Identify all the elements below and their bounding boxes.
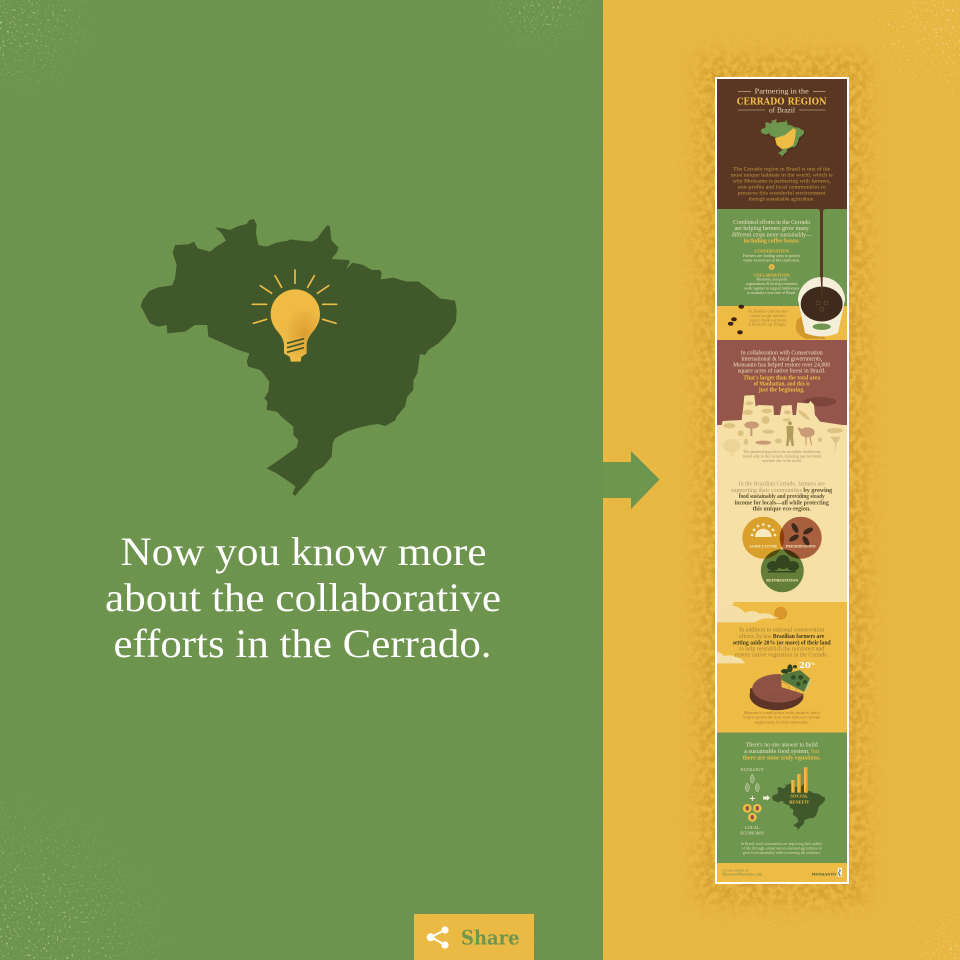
title block: CERRADO REGION: [737, 97, 827, 107]
coffee text: work together to support landowners: [744, 287, 800, 291]
arrow: [603, 451, 660, 509]
skyline and wildlife illustration: [717, 395, 847, 456]
communities text: this unique eco-region.: [753, 507, 811, 513]
venn circles: [742, 517, 822, 592]
equation text: a sustainable food system, but: [744, 748, 820, 755]
mini map of Brazil: [761, 119, 805, 158]
icon: agriculture: [751, 523, 776, 537]
icon: ampersand badge: &: [770, 265, 774, 270]
land use caption: [743, 711, 820, 724]
panel: brown intro: [717, 79, 847, 210]
communities text: [731, 480, 832, 513]
conservation text: That's larger than the total area: [743, 375, 820, 381]
coffee text: [732, 219, 812, 295]
coffee text: COLLABORATION: [754, 273, 790, 277]
panel: footer: LEARN MORE AT: [722, 869, 750, 873]
share button: [414, 914, 534, 960]
conservation text: [733, 351, 830, 393]
beans: [728, 305, 744, 334]
headline: [105, 529, 501, 666]
land use text: setting aside 20% (or more) of their land: [733, 639, 831, 646]
conservation text: just the beginning.: [758, 387, 805, 393]
panel: yellow coffee cup: [717, 276, 847, 341]
equation caption: grow food sustainably while recovering the rainforest.: [743, 851, 821, 855]
equation caption: In Brazil, local communities are improving their quality: [741, 842, 822, 847]
communities text: In the Brazilian Cerrado, farmers are: [739, 480, 825, 487]
icon: Monsanto logo: [838, 868, 842, 877]
intro paragraph: preserve this wonderful environment: [738, 189, 826, 196]
icon: light bulb: [252, 270, 337, 362]
communities text: food sustainably and providing steady: [739, 494, 825, 500]
ecology inputs: [740, 767, 770, 836]
conservation text: International & local governments,: [741, 357, 823, 363]
venn circles: AGRICULTURE: [748, 544, 778, 548]
equation caption: of life through conservation-oriented agriculture to: [742, 847, 822, 851]
coffee text: water resources in the rainforest.: [743, 258, 800, 262]
intro paragraph: [731, 166, 833, 203]
venn circles: PRESERVATION: [786, 544, 816, 548]
panel: green equation: [717, 732, 847, 864]
pie chart: 20 percent: [750, 661, 815, 710]
panel: cream communities: [717, 395, 847, 603]
wildlife caption: nowhere else in the world.: [762, 459, 802, 463]
wildlife caption: [743, 450, 821, 463]
headline: about the collaborative: [105, 575, 501, 620]
land use caption: supply forests for local communities.: [755, 720, 809, 724]
coffee text: Farmers are finding ways to protect: [743, 254, 801, 258]
ecology inputs: ECOLOGY: [741, 767, 765, 772]
conservation text: In collaboration with Conservation: [741, 351, 823, 357]
title block: [737, 87, 827, 114]
coffee cup: [796, 276, 845, 339]
icon: reforestation: [767, 555, 799, 572]
conservation text: Monsanto has helped restore over 24,000: [733, 363, 830, 369]
pie chart: 20 percent: 20: [799, 661, 811, 671]
equation text: [743, 743, 821, 761]
land use text: restore native vegetation in the Cerrado.: [735, 652, 829, 658]
coffee text: different crops more sustainably—: [732, 231, 812, 238]
white frame: [715, 77, 849, 884]
land use caption: Monsanto is a small partner in this initiative, which: [744, 711, 820, 716]
intro paragraph: through sustainable agriculture.: [749, 197, 815, 203]
intro paragraph: why Monsanto is partnering with farmers,: [733, 177, 831, 184]
ecology inputs: ECONOMY: [740, 831, 765, 836]
coffee text: including coffee beans.: [744, 239, 800, 245]
intro paragraph: The Cerrado region in Brazil is one of the: [733, 166, 831, 173]
coffee text: are helping farmers grow many: [735, 225, 809, 232]
icon: preservation: [788, 522, 814, 547]
headline: efforts in the Cerrado.: [114, 621, 492, 666]
cup note: [748, 309, 788, 328]
cup note: in Brazil, they say 'Obrigado.': [748, 323, 788, 328]
land use caption: helps to protect the local water table and cultivate: [743, 716, 820, 720]
background: yellow panel: [603, 0, 960, 960]
grunge halo around infographic: [697, 55, 868, 905]
share button: Share: [461, 926, 520, 950]
land use text: efforts, by law Brazilian farmers are: [739, 633, 825, 640]
pie chart: 20 percent: %: [811, 661, 815, 666]
cup note: So, Brazilian coffee the next: [748, 309, 788, 314]
land use text: [733, 627, 831, 658]
infographic thumbnail: [715, 77, 849, 884]
equation caption: [741, 842, 822, 855]
intro paragraph: non-profits and local communities to: [738, 184, 826, 191]
coffee text: to maintain a true taste of Brazil.: [747, 291, 796, 295]
title block: Partnering in the: [755, 87, 809, 96]
coffee text: organizations & local governments: [746, 282, 798, 286]
communities text: income for locals—all while protecting: [735, 500, 829, 506]
ecology inputs: LOCAL: [745, 825, 760, 830]
sun: [774, 607, 787, 620]
headline: Now you know more: [120, 529, 487, 574]
land use text: In addition to national conservation: [739, 627, 824, 633]
wildlife caption: This partnership protects the incredible biodiversity: [743, 450, 821, 454]
panel: yellow land use: [717, 602, 847, 733]
panel: green coffee: [717, 209, 847, 307]
cup note: forget to thank your barista: [750, 318, 787, 322]
panel: footer: [717, 863, 847, 882]
coffee text: CONSERVATION: [754, 250, 790, 254]
wildlife caption: found only in the Cerrado, including species found: [743, 455, 821, 460]
Brazil silhouette: [141, 219, 457, 496]
equation text: There's no one answer to build: [746, 743, 818, 749]
icon: share: [427, 926, 449, 949]
conservation text: square acres of native forest in Brazil.: [738, 368, 826, 375]
panel: footer: DiscoverMonsanto.com: [722, 873, 762, 877]
social benefit map: [772, 767, 825, 830]
panel: footer: MONSANTO: [812, 873, 836, 877]
panel: red conservation: [717, 340, 847, 435]
clouds: [717, 602, 779, 663]
coffee text: Monsanto, non-profit: [756, 277, 788, 282]
coffee text: Combined efforts in the Cerrado: [733, 219, 810, 226]
land use text: to help reestablish the rainforest and: [739, 646, 824, 653]
equation text: there are some truly equations.: [743, 755, 821, 761]
communities text: supporting their communities by growing: [731, 488, 832, 494]
map of Brazil with light bulb: [141, 219, 457, 496]
social benefit map: SOCIAL: [790, 794, 808, 799]
conservation text: of Manhattan, and this is: [754, 381, 810, 387]
venn circles: REFORESTATION: [766, 578, 798, 582]
title block: of Brazil: [769, 106, 795, 114]
social benefit map: BENEFIT: [789, 799, 809, 804]
cup note: coaster you get, and don't: [750, 314, 786, 319]
intro paragraph: most unique habitats in the world, which is: [731, 172, 833, 178]
background: green panel: [0, 0, 603, 960]
ecology inputs: +: [749, 793, 756, 803]
